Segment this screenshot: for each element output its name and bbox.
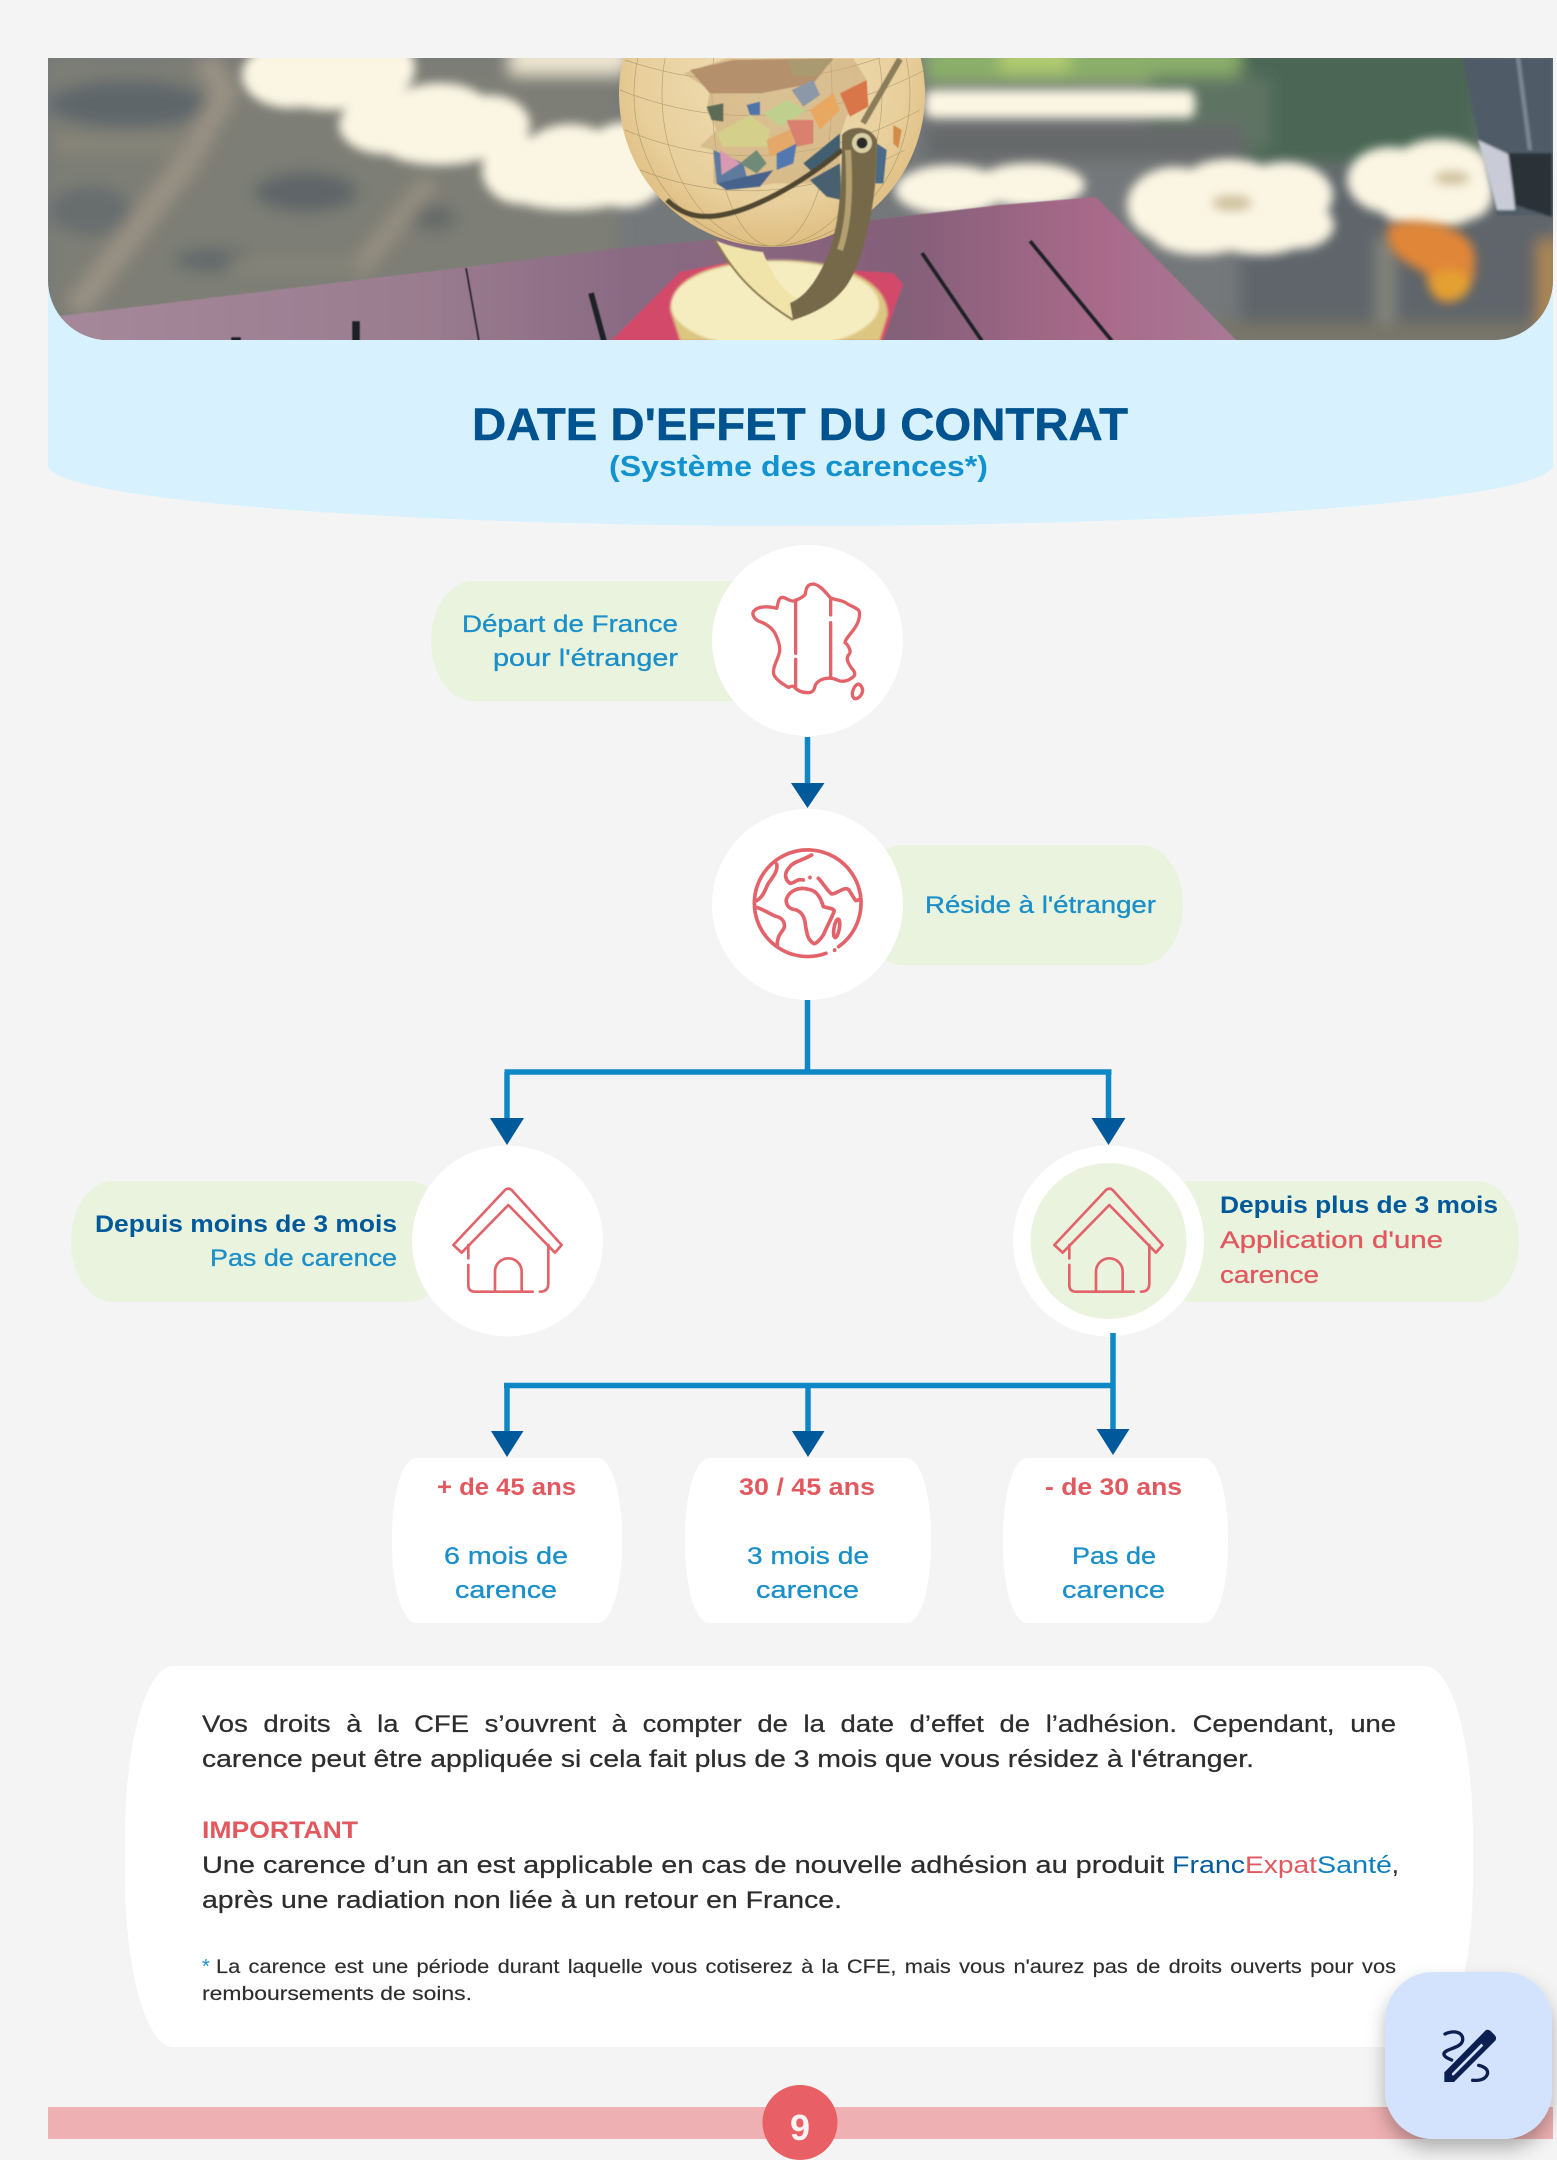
case: depuis moins de 3 mois: Depuis moins de 3 mois — [95, 1211, 397, 1238]
paragraph: important: Franc — [1172, 1852, 1245, 1879]
paragraph: rights — [202, 1711, 1396, 1773]
paragraph: important: Une carence d’un an est applicable en cas de nouvelle adhésion au produit — [202, 1852, 1164, 1879]
footnote — [202, 1956, 1396, 2005]
paragraph: important: après une radiation non liée à un retour en France. — [202, 1887, 842, 1914]
case: depuis plus de 3 mois: Application d'une — [1220, 1227, 1443, 1254]
card: moins de 30 ans: carence — [1062, 1577, 1165, 1604]
card: plus de 45 ans: + de 45 ans — [437, 1474, 576, 1501]
card: 30 à 45 ans: carence — [756, 1577, 859, 1604]
header panel: light blue backdrop — [48, 280, 1553, 526]
icon: map of France — [753, 584, 863, 699]
icon: house — [453, 1189, 562, 1292]
card: plus de 45 ans: 6 mois de — [444, 1543, 568, 1570]
paragraph: important: IMPORTANT — [202, 1817, 358, 1844]
paragraph: important: , — [1392, 1852, 1399, 1879]
card: moins de 30 ans: - de 30 ans — [1045, 1474, 1182, 1501]
icon: pen and scribble — [1444, 2030, 1496, 2082]
footnote: * — [202, 1956, 210, 1978]
footer bar — [48, 2107, 1553, 2139]
jeans in photo corner — [1462, 57, 1553, 217]
footnote: La carence est une période durant laquelle vous cotiserez à la CFE, mais vous n'aurez pas de droits ouverts pour vos — [216, 1956, 1396, 1978]
connector: split to age groups — [491, 1333, 1130, 1457]
globe equator band, meridian ring and brass stand — [667, 59, 900, 320]
title — [472, 399, 1128, 483]
icon: earth globe — [754, 850, 861, 957]
page number — [762, 2085, 838, 2160]
step: départ de France — [431, 545, 903, 736]
step: réside à l'étranger: Réside à l'étranger — [925, 892, 1156, 919]
card: plus de 45 ans — [392, 1458, 622, 1623]
connector: split to two cases — [490, 1000, 1126, 1145]
icon: house highlighted — [1054, 1189, 1163, 1292]
paragraph: important — [202, 1817, 1399, 1914]
title: DATE D'EFFET DU CONTRAT — [472, 399, 1128, 450]
page number: 9 — [790, 2107, 810, 2148]
globe — [619, 58, 925, 247]
arrow: step 1 to step 2 — [791, 737, 824, 808]
paragraph: important: Santé — [1317, 1852, 1392, 1879]
footnote: remboursements de soins. — [202, 1983, 472, 2005]
card: 30 à 45 ans: 3 mois de — [747, 1543, 869, 1570]
floating edit button — [1385, 1972, 1552, 2139]
step: réside à l'étranger — [712, 809, 1183, 1000]
card: 30 à 45 ans: 30 / 45 ans — [739, 1474, 875, 1501]
step: départ de France: pour l'étranger — [493, 645, 678, 672]
panel: explanation text — [125, 1666, 1473, 2047]
case: depuis plus de 3 mois — [1013, 1146, 1519, 1336]
paragraph: rights: carence peut être appliquée si cela fait plus de 3 mois que vous résidez à l'étranger. — [202, 1746, 1254, 1773]
header photo: globe on a table — [48, 58, 1553, 340]
paragraph: rights: Vos droits à la CFE s’ouvrent à compter de la date d’effet de l’adhésion. Cependant, une — [202, 1711, 1396, 1738]
card: 30 à 45 ans — [685, 1458, 931, 1623]
brass base — [670, 260, 888, 349]
card: moins de 30 ans: Pas de — [1072, 1543, 1156, 1570]
paragraph: important: Expat — [1245, 1852, 1317, 1879]
card: moins de 30 ans — [1003, 1458, 1228, 1623]
subtitle: (Système des carences*) — [609, 451, 988, 483]
case: depuis plus de 3 mois: Depuis plus de 3 mois — [1220, 1192, 1498, 1219]
card: plus de 45 ans: carence — [455, 1577, 557, 1604]
case: depuis plus de 3 mois: carence — [1220, 1262, 1319, 1289]
wooden table — [48, 197, 1240, 344]
step: départ de France: Départ de France — [462, 611, 678, 638]
case: depuis moins de 3 mois: Pas de carence — [210, 1245, 397, 1272]
case: depuis moins de 3 mois — [71, 1146, 603, 1336]
